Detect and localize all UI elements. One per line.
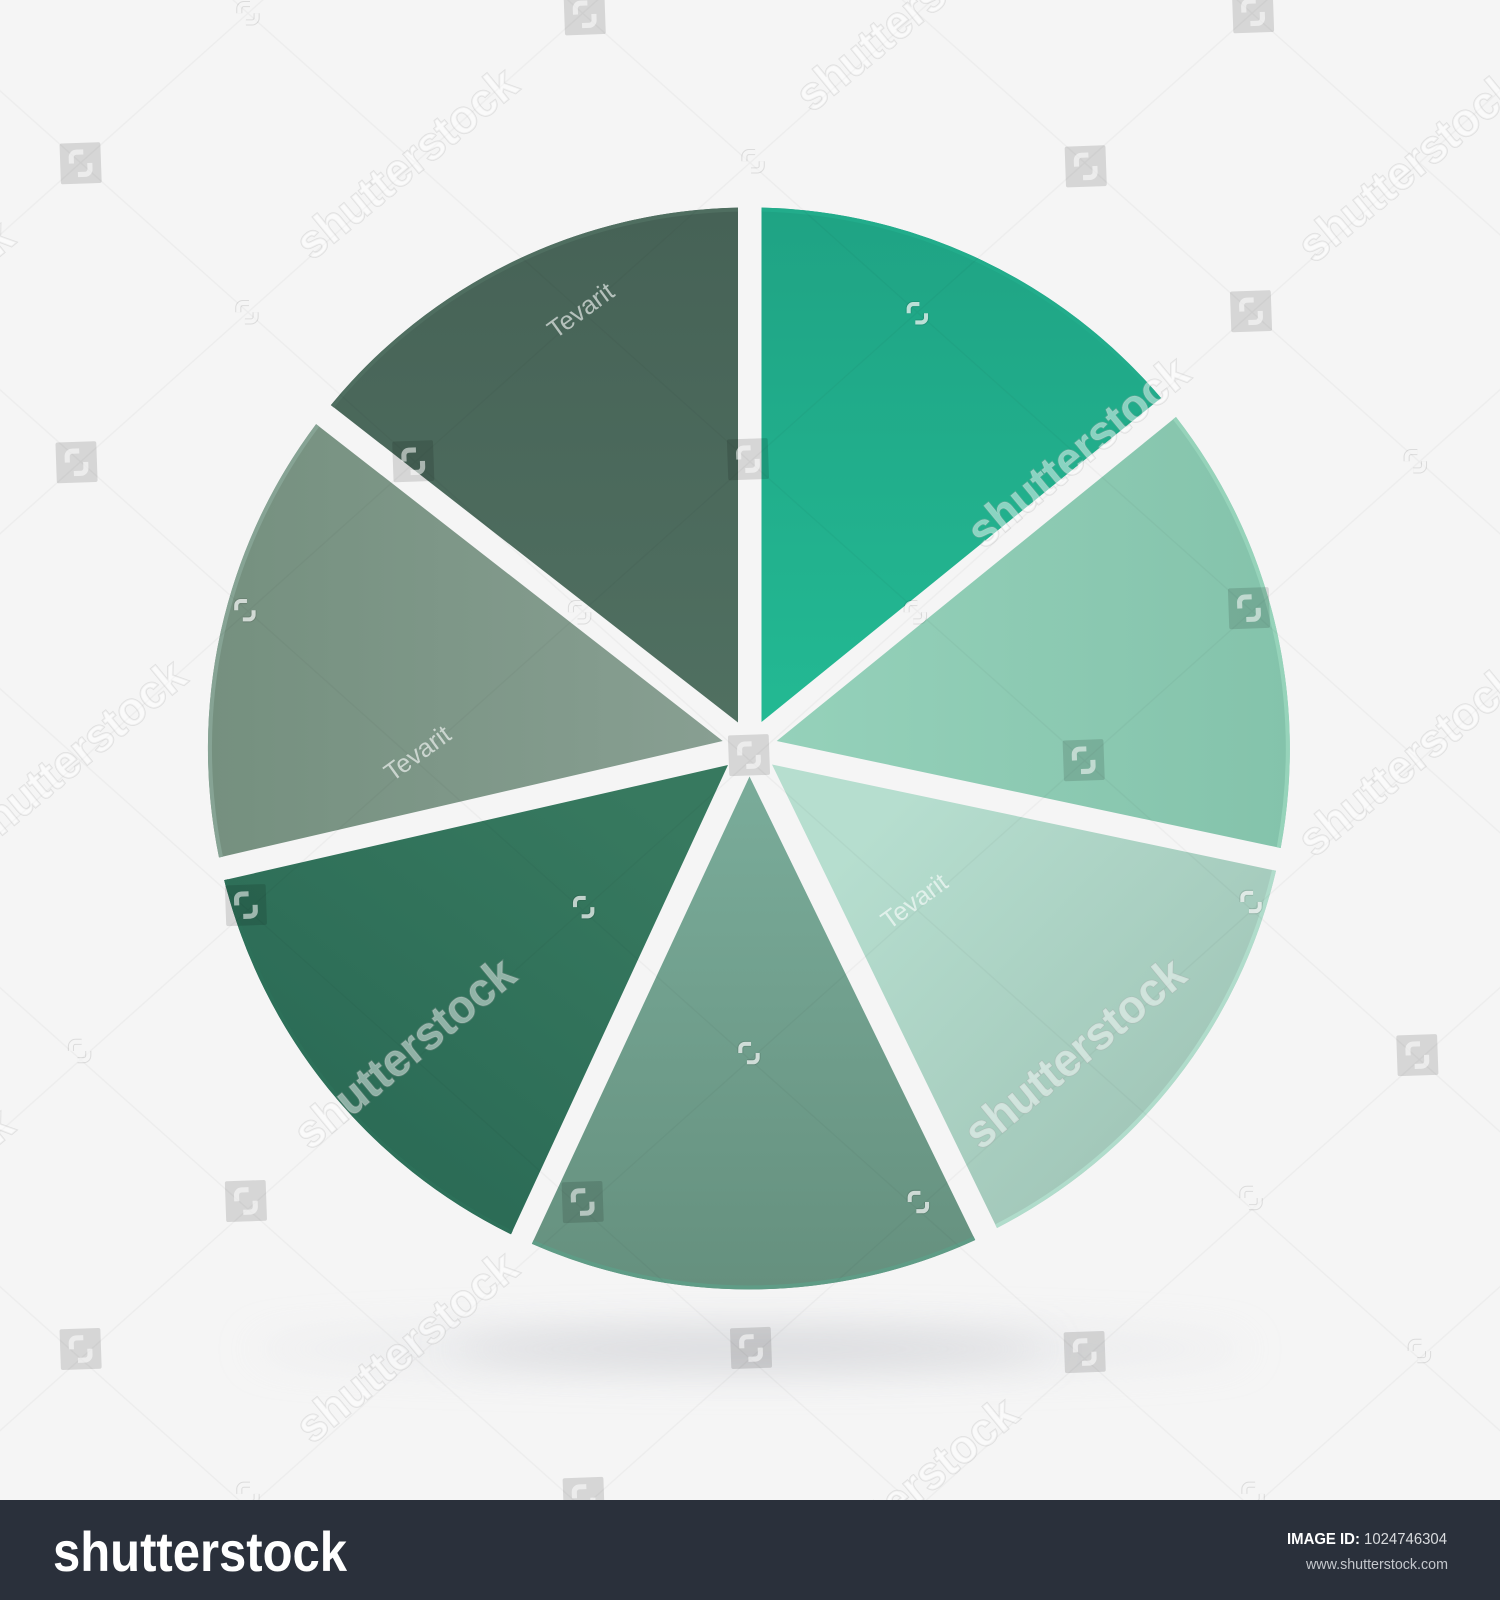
segment 1: bright green xyxy=(762,208,1161,722)
segment 3: pale green xyxy=(772,764,1276,1228)
Tevarit credit marks: Tevarit xyxy=(542,277,620,344)
watermark wordmarks: shutterstock xyxy=(957,345,1199,558)
pie drop shadow xyxy=(250,1327,1250,1371)
Tevarit credit marks: Tevarit xyxy=(379,720,456,787)
watermark wordmarks: shutterstock xyxy=(286,56,528,269)
image id: IMAGE ID: 1024746304 xyxy=(1287,1531,1447,1548)
segment 2: light green xyxy=(777,417,1290,848)
watermark wordmarks: shutterstock xyxy=(283,946,526,1159)
segment 7: dark grey green xyxy=(331,208,738,723)
watermark wordmarks: shutterstock xyxy=(786,1386,1028,1599)
footer logo: shutterstock xyxy=(53,1520,348,1583)
segment 6: grey green xyxy=(208,424,723,858)
Tevarit credit marks xyxy=(379,277,953,935)
footer bar xyxy=(0,1500,1500,1600)
pie chart xyxy=(208,208,1290,1289)
watermark wordmarks: shutterstock xyxy=(954,946,1196,1159)
segment 5: deep green xyxy=(224,765,728,1234)
Tevarit credit marks: Tevarit xyxy=(876,868,953,935)
watermark wordmarks: shutterstock xyxy=(286,1240,528,1453)
website url: www.shutterstock.com xyxy=(1305,1556,1448,1573)
segment 4: mid green xyxy=(532,776,975,1289)
